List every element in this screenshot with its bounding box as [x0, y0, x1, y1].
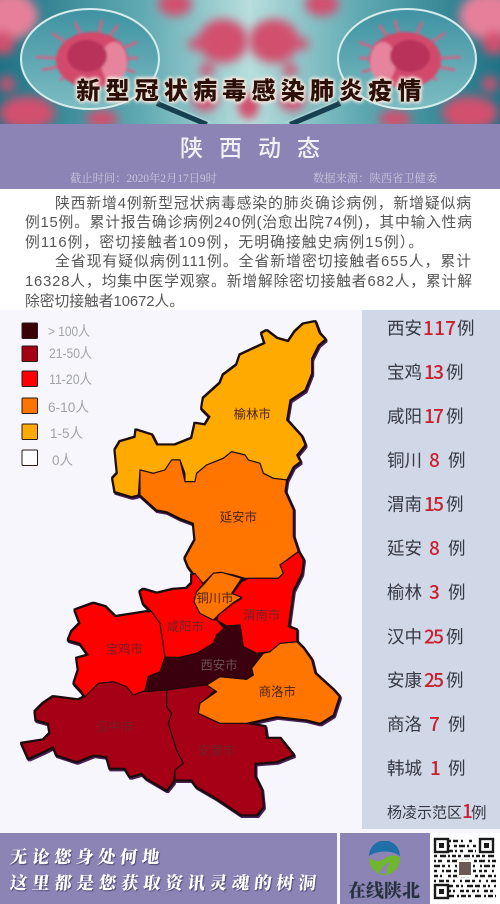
- row: Hanzhong: [387, 622, 464, 650]
- text block: summary paragraphs: 除密切接触者10672人。: [25, 293, 184, 310]
- row: Baoji: [387, 358, 464, 385]
- row: Xianyang: [387, 402, 464, 429]
- row: Shangluo: 7: [429, 710, 440, 737]
- banner: virus under magnifying glasses: [0, 0, 500, 124]
- row: Yangling: [387, 797, 487, 824]
- panel: section header: [0, 124, 500, 189]
- region: Hanzhong: [22, 682, 183, 790]
- row: Tongchuan: [387, 446, 466, 473]
- region: Yan'an: [140, 452, 298, 583]
- row: Yulin: [387, 578, 466, 605]
- row: Xi'an: [387, 314, 474, 341]
- footer band: [0, 829, 500, 904]
- row: Tongchuan: 铜川: [387, 448, 422, 472]
- row: Yulin: 3: [429, 578, 440, 605]
- slogan line 2: 这里都是您获取资讯灵魂的树洞: [9, 870, 322, 895]
- label: 渭南市: [243, 605, 280, 623]
- legend item: 6-10: 6-10人: [48, 399, 89, 415]
- row: Yangling: 例: [471, 801, 487, 823]
- row: Shangluo: 例: [448, 712, 466, 736]
- legend item: 0: [22, 450, 73, 468]
- legend item: 6-10: [22, 398, 89, 415]
- row: Yan'an: 8: [429, 534, 440, 561]
- row: Yan'an: 例: [448, 536, 466, 560]
- row: Xianyang: 17: [424, 402, 444, 429]
- legend item: 11-20: 11-20人: [49, 371, 92, 387]
- row: Xianyang: 咸阳: [387, 404, 422, 428]
- row: Weinan: 例: [446, 492, 464, 516]
- row: Xi'an: 例: [457, 316, 474, 340]
- row: Hanzhong: 例: [446, 624, 464, 649]
- logo text: 在线陕北: [348, 877, 420, 903]
- text block: summary paragraphs: 例15例。累计报告确诊病例240例(治愈出院74例)，其中输入性病: [25, 213, 472, 231]
- label: 铜川市: [196, 589, 233, 607]
- row: Weinan: 渭南: [387, 492, 422, 516]
- panel: confirmed cases by city: [362, 310, 500, 829]
- legend item: over 100: [22, 323, 90, 339]
- data source: 数据来源：陕西省卫健委: [313, 173, 437, 185]
- heading: Shaanxi news: 陕西动态: [180, 129, 336, 163]
- legend item: 21-50: 21-50人: [49, 345, 92, 361]
- legend item: over 100: > 100人: [48, 323, 90, 339]
- region: Xianyang: [140, 573, 224, 657]
- title: 新型冠状病毒感染肺炎疫情: [76, 71, 427, 106]
- row: Baoji: 宝鸡: [387, 360, 422, 384]
- row: Hancheng: [387, 754, 466, 781]
- region: Weinan: [217, 552, 303, 653]
- label: 汉中市: [96, 717, 133, 735]
- row: Ankang: [387, 666, 464, 693]
- label: 咸阳市: [167, 617, 204, 635]
- row: Xi'an: 117: [423, 314, 456, 341]
- legend: [22, 322, 92, 468]
- legend item: 0: 0人: [52, 452, 73, 468]
- label: 榆林市: [234, 405, 271, 423]
- text block: summary paragraphs: [0, 189, 500, 310]
- row: Baoji: 13: [424, 358, 444, 385]
- map of Shaanxi by city: [20, 320, 342, 818]
- icon: logo mark: [369, 841, 400, 875]
- row: Weinan: [387, 490, 464, 517]
- region: Ankang: [167, 683, 293, 815]
- region: Xi'an: [145, 625, 263, 692]
- legend item: 1-5: [22, 424, 83, 441]
- row: Yan'an: [387, 534, 466, 561]
- row: Ankang: 安康: [387, 668, 422, 692]
- cutoff time: 截止时间：2020年2月17日9时: [70, 173, 217, 185]
- row: Hanzhong: 汉中: [387, 624, 422, 649]
- row: Tongchuan: 例: [448, 448, 466, 472]
- text block: summary paragraphs: 例116例，密切接触者109例，无明确接触史病例15例）。: [25, 234, 423, 251]
- panel: slogan: [0, 833, 337, 904]
- panel: QR code: [430, 833, 500, 904]
- text block: summary paragraphs: 16328人，均集中医学观察。新增解除密切接触者682人，累计解: [25, 272, 472, 290]
- row: Yangling: 杨凌示范区: [387, 802, 462, 822]
- label: 宝鸡市: [106, 640, 143, 658]
- text block: summary paragraphs: 陕西新增4例新型冠状病毒感染的肺炎确诊病例，新增疑似病: [55, 195, 471, 212]
- row: Hancheng: 例: [448, 756, 466, 780]
- legend item: 11-20: [22, 371, 92, 387]
- panel: logo: [340, 833, 430, 904]
- row: Hanzhong: 25: [424, 622, 444, 650]
- label: 西安市: [200, 655, 237, 673]
- row: Tongchuan: 8: [429, 446, 440, 473]
- legend item: 21-50: [22, 345, 92, 362]
- row: Shangluo: 商洛: [387, 712, 422, 736]
- row: Hancheng: 1: [430, 754, 441, 781]
- region: Baoji: [68, 603, 165, 697]
- region: Tongchuan: [194, 572, 242, 620]
- row: Yan'an: 延安: [387, 536, 422, 560]
- row: Ankang: 例: [446, 668, 464, 692]
- legend item: 1-5: 1-5人: [50, 425, 83, 441]
- row: Xianyang: 例: [446, 404, 464, 428]
- region: Yulin: [113, 322, 325, 497]
- row: Xi'an: 西安: [387, 316, 422, 340]
- text block: summary paragraphs: 全省现有疑似病例111例。全省新增密切接触者655人，累计: [55, 252, 471, 270]
- row: Hancheng: 韩城: [387, 756, 422, 780]
- label: 延安市: [220, 508, 257, 526]
- slogan line 1: 无论您身处何地: [9, 844, 165, 869]
- region: Shangluo: [198, 642, 339, 723]
- row: Ankang: 25: [424, 666, 444, 693]
- row: Yulin: 榆林: [387, 580, 422, 604]
- row: Weinan: 15: [424, 490, 444, 517]
- label: 安康市: [198, 741, 235, 759]
- label: 商洛市: [259, 682, 296, 700]
- row: Shangluo: [387, 710, 466, 737]
- row: Baoji: 例: [446, 360, 464, 384]
- row: Yulin: 例: [448, 580, 466, 604]
- row: Yangling: 1: [462, 797, 473, 824]
